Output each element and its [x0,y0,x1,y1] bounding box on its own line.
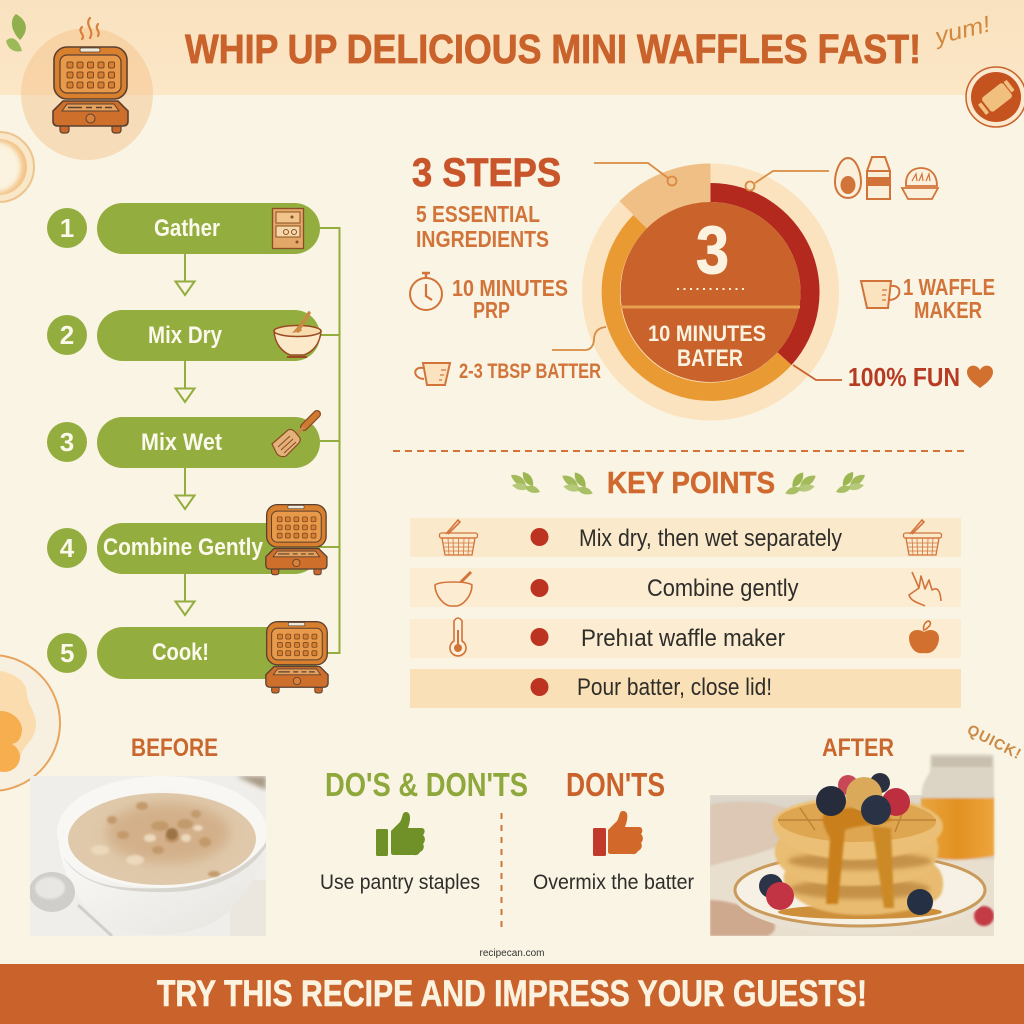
donut chart [582,163,839,420]
before heading: BEFORE [131,734,218,762]
step 5 cook: 5 [60,638,74,668]
step 4 combine gently: 4 [60,533,75,563]
icon: waffle maker step 4 [266,505,327,575]
step 2 mix dry [47,310,320,361]
step 2 mix dry: 2 [60,320,74,350]
step 1 gather: Gather [154,215,220,242]
quick note: QUICK! [964,721,1024,763]
key point 3: Prehıat waffle maker [581,625,785,652]
key point 2 [410,568,961,607]
title: WHIP UP DELICIOUS MINI WAFFLES FAST! [185,26,921,72]
footer band [0,964,1024,1024]
step 4 combine gently [47,523,320,574]
steps flow [47,203,340,693]
stat: 1 waffle maker [903,274,995,323]
stat: 10 minutes prep [452,275,568,323]
step 3 mix wet: 3 [60,427,74,457]
berries [759,773,933,915]
step 3 mix wet: Mix Wet [141,429,222,456]
icon: egg [835,158,861,198]
key point 3 [410,618,961,658]
do text: Use pantry staples [320,871,480,894]
key point 4 [410,669,961,708]
arrow 3 to 4 [176,468,194,509]
honey jar [921,754,994,860]
stat: 10 minutes prep: PRP [473,297,510,323]
icon: spatula [272,414,317,457]
step 4 combine gently: Combine Gently [103,534,264,561]
dashed divider [393,450,967,452]
icon: food bowl [902,168,938,199]
stat: 100 percent fun: 100% FUN [848,362,960,392]
icon: measuring cup right [861,281,899,308]
key points heading [511,465,865,500]
icon: waffle maker hero with steam [21,18,153,160]
do's and don'ts heading: DO'S & DON'TS [325,766,528,803]
key point 1: Mix dry, then wet separately [579,525,842,552]
photo: after waffle stack [710,754,994,936]
icon: pantry cabinet [272,208,304,248]
icon: leaves top left [6,14,26,52]
don'ts heading: DON'TS [566,766,665,803]
decor: flour plate left edge [0,132,34,202]
stat: 3 steps: 3 STEPS [412,151,561,195]
donut chart: BATER [677,345,743,372]
don't text: Overmix the batter [533,871,694,894]
connector lines [318,228,340,653]
stat: 1 waffle maker: MAKER [914,297,982,323]
icon: mixing bowl [274,313,321,357]
arrow 4 to 5 [176,574,194,615]
waffles [773,797,943,915]
icon: round butter badge [966,67,1024,127]
footer call to action: TRY THIS RECIPE AND IMPRESS YOUR GUESTS! [157,973,867,1014]
icon: thumbs up orange [593,811,643,856]
step 5 cook [47,627,320,679]
arrow 2 to 3 [176,361,194,402]
arrow 1 to 2 [176,254,194,295]
icon: measuring cup left [415,363,450,385]
icon: heart [967,366,993,388]
handwritten yum: yum! [930,10,993,50]
header band [0,0,1024,95]
stat: batter amount: 2-3 TBSP BATTER [459,360,601,383]
key point 1 [410,518,961,557]
donut chart: 3 [696,212,729,288]
leader lines [552,163,842,380]
stat: 5 essential ingredients: INGREDIENTS [416,226,549,252]
icon: waffle maker step 5 [266,622,328,693]
step 1 gather: 1 [60,213,74,243]
key point 2: Combine gently [647,575,798,602]
after heading: AFTER [822,734,894,762]
step 2 mix dry: Mix Dry [148,322,223,349]
stat: 5 essential ingredients [416,201,549,252]
step 5 cook: Cook! [152,639,209,666]
stat: 10 minutes prep: 10 MINUTES [452,275,568,301]
step 3 mix wet [47,417,320,468]
donut chart: 10 MINUTES [648,321,766,346]
photo: before oatmeal bowl [29,776,270,940]
dashed vertical divider [500,813,502,930]
key points heading: KEY POINTS [607,465,775,500]
stat: 1 waffle maker: 1 WAFFLE [903,274,995,300]
plate [734,856,986,934]
step 1 gather [47,203,320,254]
key point 4: Pour batter, close lid! [577,674,772,701]
icon: milk carton [867,157,890,199]
decor: butter plate left edge [0,655,60,791]
icon: thumbs up green [376,812,425,856]
stat: 5 essential ingredients: 5 ESSENTIAL [416,201,540,227]
source credit: recipecan.com [479,948,545,959]
icon: stopwatch [410,273,442,310]
